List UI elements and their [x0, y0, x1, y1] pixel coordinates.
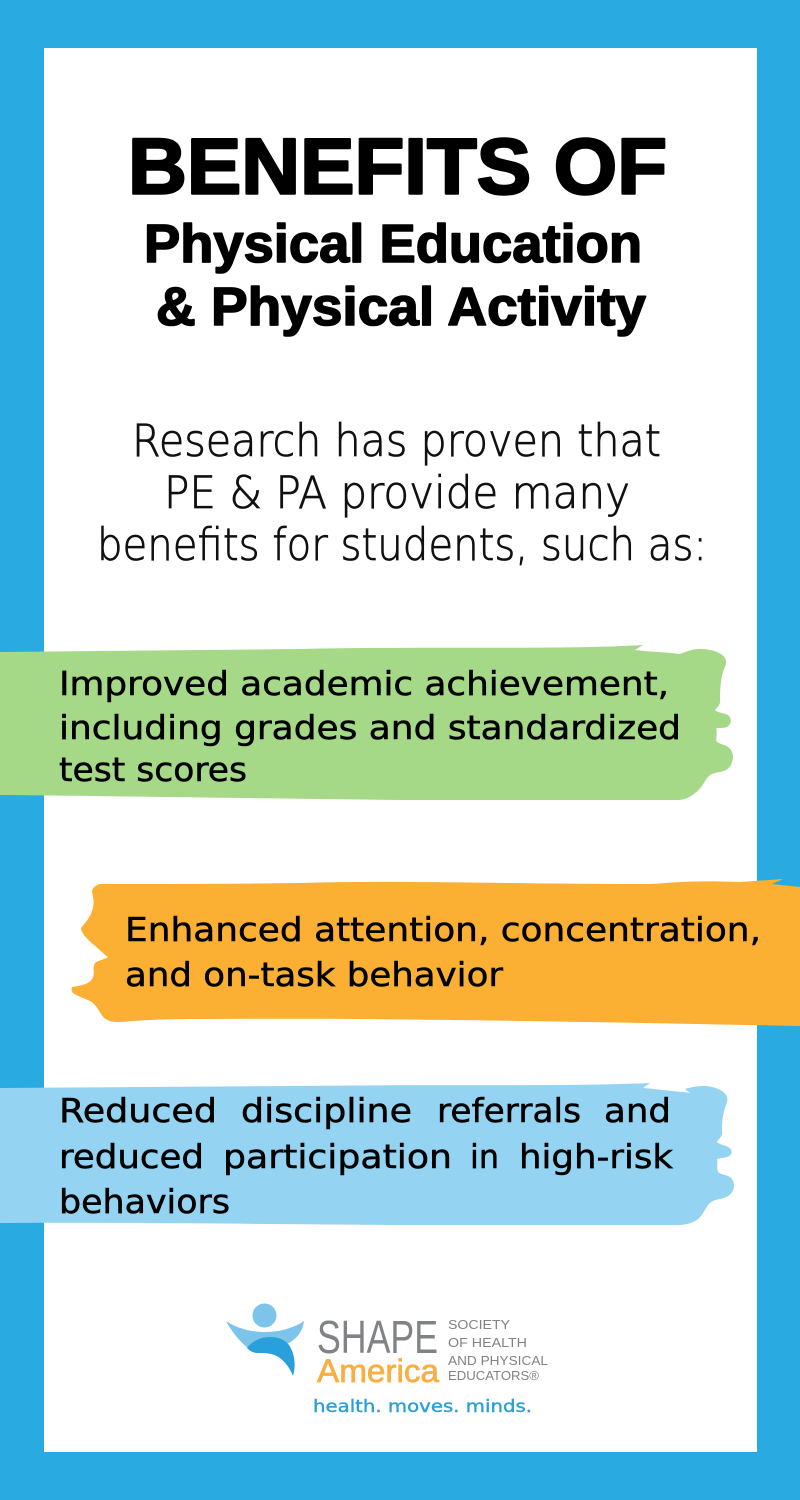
- academic achievement text: [59, 664, 681, 789]
- society descriptor: SOCIETY: [448, 1317, 510, 1332]
- attention text: Enhanced attention, concentration,: [125, 910, 761, 949]
- discipline referrals text: reduced: [59, 1137, 204, 1176]
- logo: SHAPE America: [226, 1304, 548, 1417]
- intro text: PE & PA provide many: [164, 468, 630, 519]
- intro text: [97, 416, 707, 571]
- panel: attention and concentration: [72, 879, 800, 1026]
- discipline referrals text: discipline: [241, 1091, 412, 1130]
- society descriptor: [448, 1317, 548, 1383]
- society descriptor: AND PHYSICAL: [448, 1353, 548, 1368]
- intro text: benefits for students, such as:: [97, 520, 707, 571]
- title: [128, 122, 667, 337]
- discipline referrals text: participation: [223, 1137, 452, 1176]
- academic achievement text: Improved academic achievement,: [59, 664, 669, 703]
- discipline referrals text: behaviors: [59, 1182, 230, 1221]
- academic achievement text: including grades and standardized: [59, 708, 681, 747]
- title: Physical Education: [144, 214, 642, 274]
- academic achievement text: test scores: [59, 750, 247, 789]
- wordmark SHAPE: SHAPE: [317, 1311, 438, 1363]
- panel: reduced discipline referrals: [0, 1083, 734, 1225]
- discipline referrals text: in: [470, 1137, 499, 1176]
- society descriptor: EDUCATORS®: [448, 1368, 539, 1383]
- discipline referrals text: and: [604, 1091, 671, 1130]
- panel: academic achievement: [0, 645, 733, 800]
- discipline referrals text: high-risk: [519, 1137, 674, 1176]
- tagline: health. moves. minds.: [313, 1397, 532, 1417]
- attention text: and on-task behavior: [125, 955, 503, 994]
- society descriptor: OF HEALTH: [448, 1335, 527, 1350]
- wordmark America: America: [317, 1353, 439, 1389]
- discipline referrals text: referrals: [437, 1091, 581, 1130]
- title: & Physical Activity: [156, 277, 646, 337]
- attention text: [125, 910, 761, 994]
- intro text: Research has proven that: [132, 416, 661, 467]
- icon: figure with raised arms: [226, 1304, 304, 1376]
- title: BENEFITS OF: [128, 122, 667, 210]
- discipline referrals text: [59, 1091, 674, 1221]
- discipline referrals text: Reduced: [59, 1091, 217, 1130]
